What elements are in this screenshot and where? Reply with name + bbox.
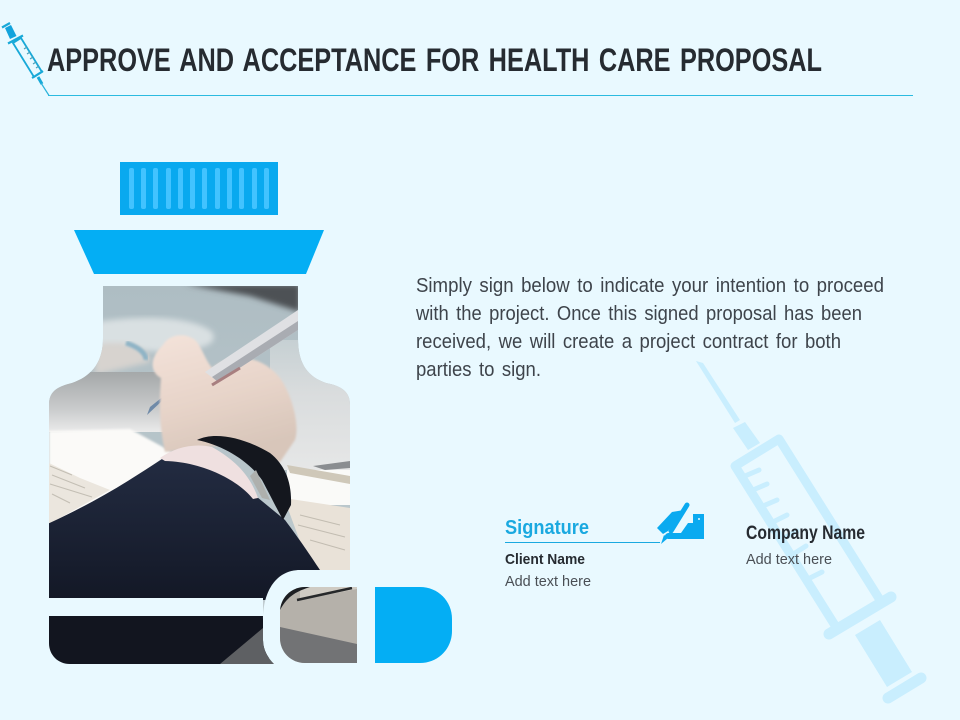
body paragraph: with the project. Once this signed proposal has been bbox=[415, 303, 862, 325]
header syringe icon bbox=[2, 23, 49, 96]
company add text: Add text here bbox=[746, 551, 832, 568]
body paragraph: Simply sign below to indicate your intention to proceed bbox=[416, 275, 884, 297]
client add text: Add text here bbox=[505, 573, 591, 590]
body paragraph bbox=[415, 275, 884, 381]
bottle photo: hand signing document bbox=[41, 284, 354, 664]
signature heading: Signature bbox=[505, 517, 589, 539]
bottle collar bbox=[74, 230, 324, 274]
company name: Company Name bbox=[746, 523, 865, 544]
body paragraph: received, we will create a project contract for both bbox=[416, 331, 841, 353]
small pill half with photo bbox=[280, 587, 357, 663]
icon: hand signing bbox=[657, 505, 704, 544]
client name: Client Name bbox=[505, 551, 585, 568]
body paragraph: parties to sign. bbox=[416, 359, 541, 381]
signature line bbox=[505, 542, 660, 544]
header rule bbox=[48, 94, 913, 96]
blue pill half bbox=[375, 587, 452, 663]
background syringe watermark bbox=[696, 361, 921, 698]
bottle cap ribbed bbox=[120, 162, 278, 215]
